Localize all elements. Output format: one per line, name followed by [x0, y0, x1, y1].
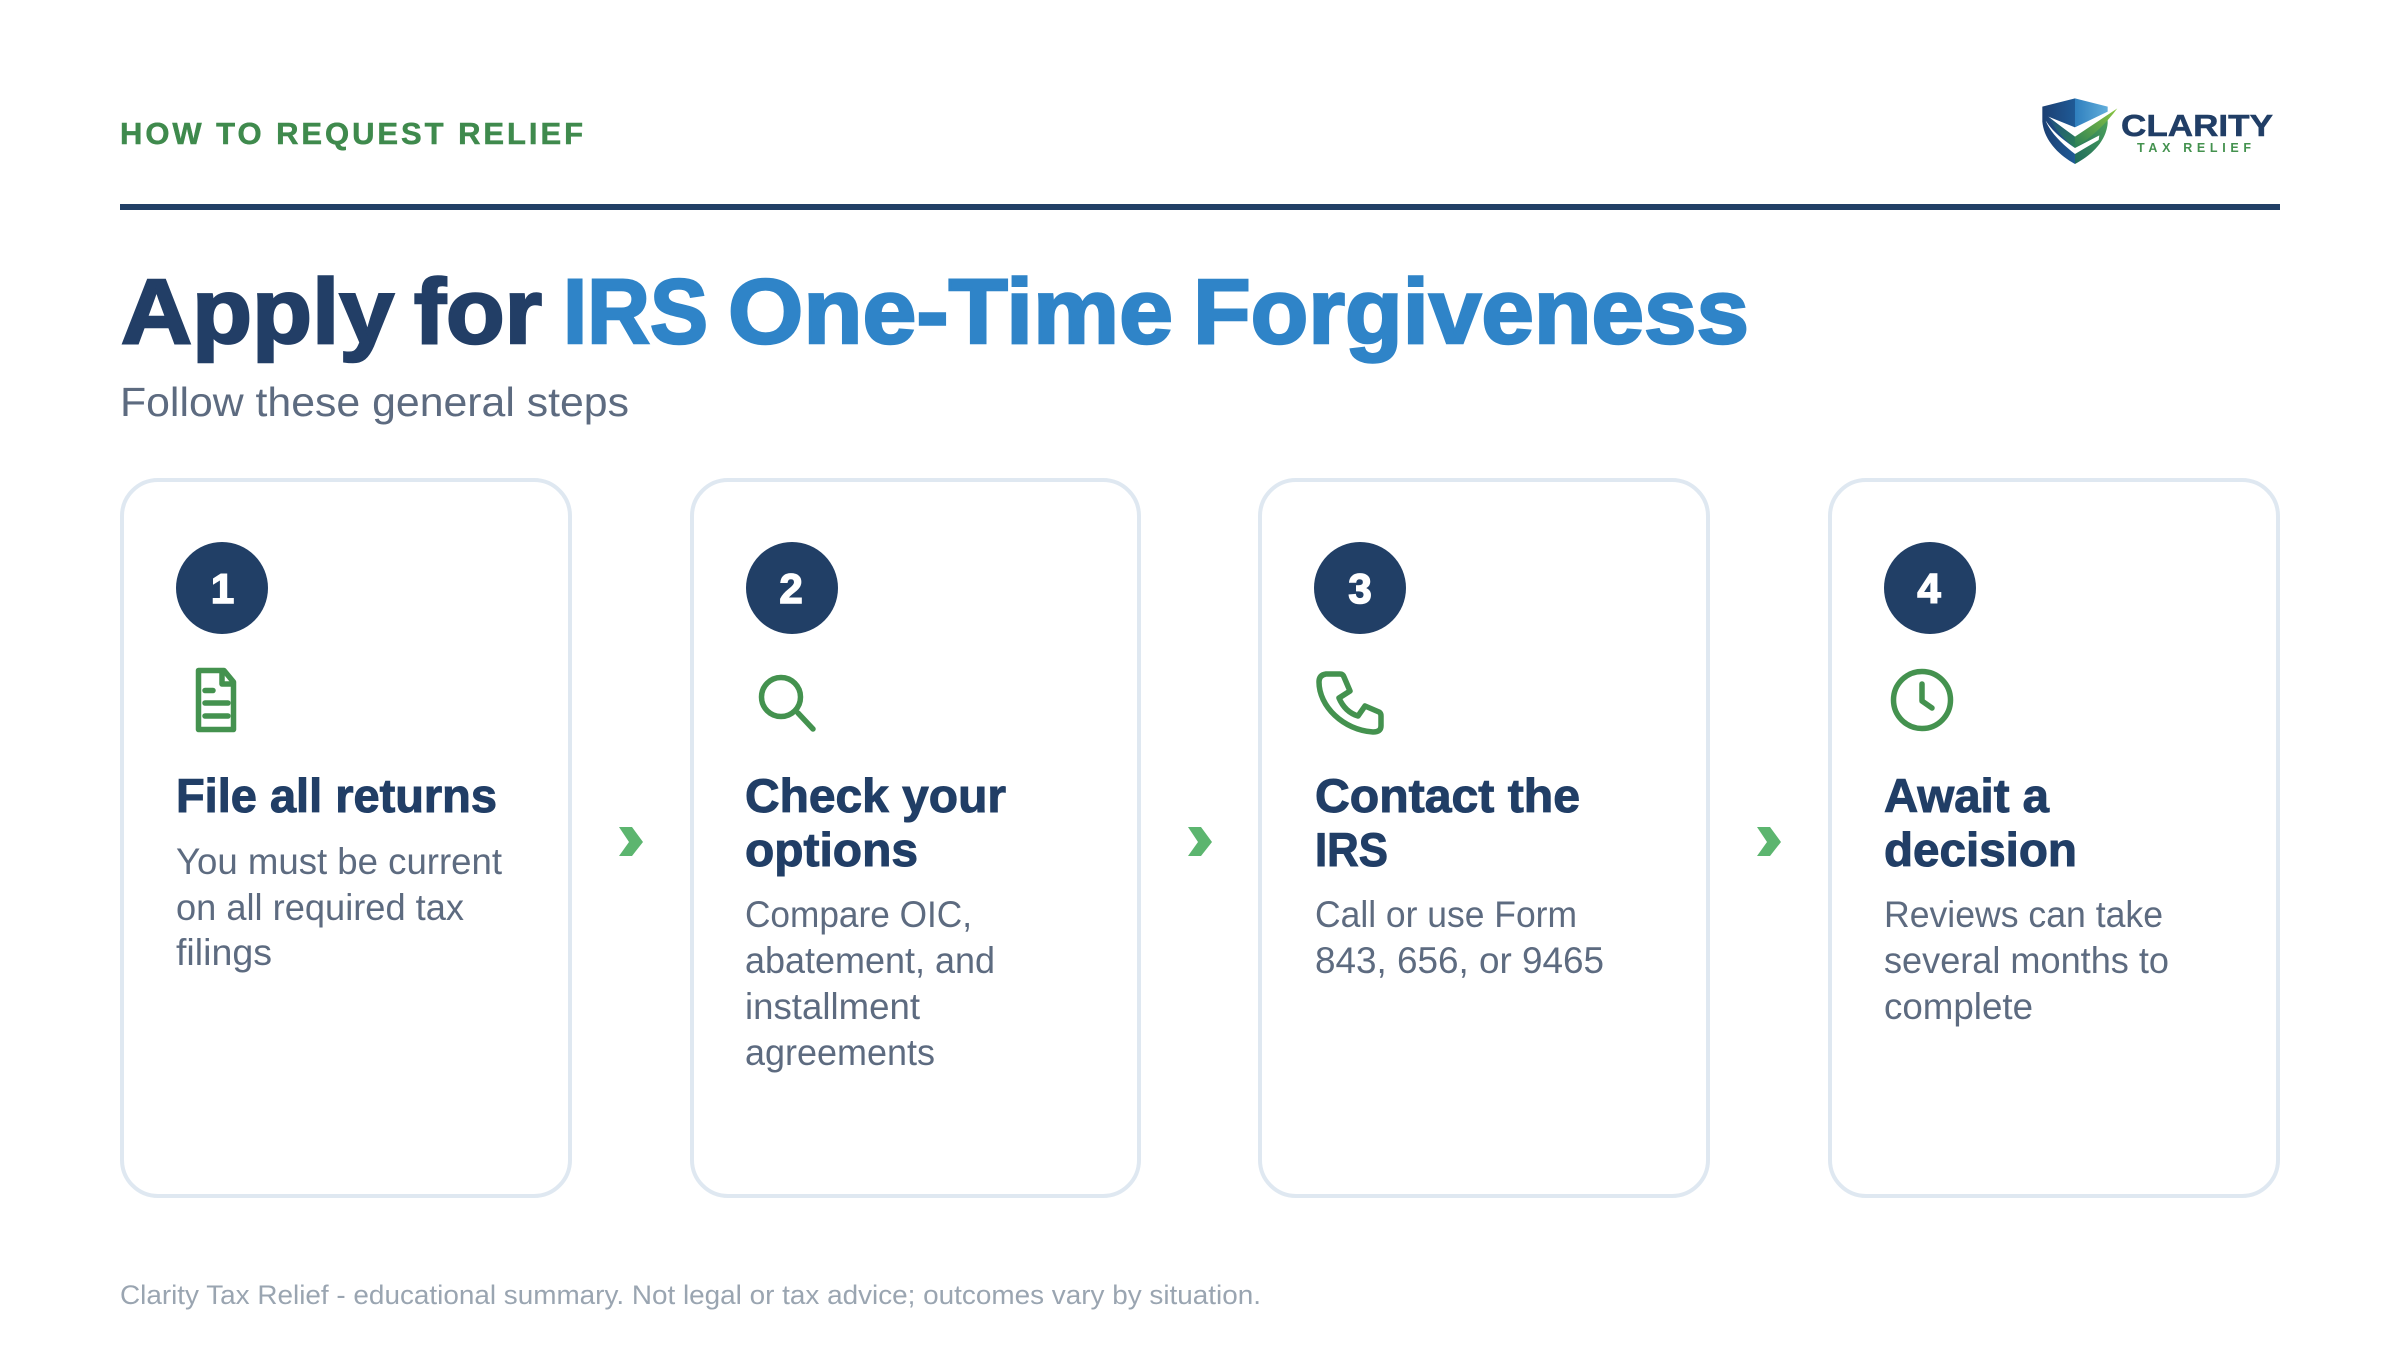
step number 1 [176, 542, 268, 634]
step heading [745, 769, 1006, 876]
step description: complete [1884, 986, 2033, 1027]
step description: You must be current [176, 841, 503, 882]
icon: clock [1894, 672, 1950, 728]
icon: shield with check [2042, 98, 2117, 164]
step heading: decision [1884, 823, 2077, 876]
step description: 843, 656, or 9465 [1315, 940, 1604, 981]
logo wordmark: CLARITY [2121, 108, 2273, 143]
step number 4 [1884, 542, 1976, 634]
step description [1884, 894, 2169, 1027]
step heading [1315, 769, 1580, 876]
arrow 1 [619, 827, 643, 856]
panel: step 2 [692, 480, 1139, 1196]
eyebrow heading: HOW TO REQUEST RELIEF [120, 116, 583, 151]
step description: installment [745, 986, 921, 1027]
title: Forgiveness [1193, 261, 1749, 363]
panel: step 4 [1830, 480, 2278, 1196]
step heading: options [745, 823, 918, 876]
title: IRS [563, 261, 708, 363]
icon: document [198, 670, 234, 730]
step number 2: 2 [779, 565, 803, 612]
step description: abatement, and [745, 940, 995, 981]
step description [176, 841, 503, 973]
step description: Compare OIC, [745, 894, 972, 935]
step number 3 [1314, 542, 1406, 634]
subtitle: Follow these general steps [120, 379, 629, 425]
panel: step 3 [1260, 480, 1708, 1196]
step number 2 [746, 542, 838, 634]
step heading: Check your [745, 769, 1006, 822]
step number 3: 3 [1348, 565, 1372, 612]
step heading: File all returns [176, 769, 497, 822]
step description: filings [176, 932, 272, 973]
step description: Reviews can take [1884, 894, 2163, 935]
step heading: Await a [1884, 769, 2050, 822]
step description [745, 894, 995, 1073]
step description: Call or use Form [1315, 894, 1577, 935]
step heading: Contact the [1315, 769, 1580, 822]
step description [1315, 894, 1604, 981]
step description: several months to [1884, 940, 2169, 981]
icon: magnifier [762, 678, 813, 729]
arrow 2 [1188, 827, 1212, 856]
step description: on all required tax [176, 887, 464, 928]
title: One-Time [728, 261, 1173, 363]
footer disclaimer: Clarity Tax Relief - educational summary. Not legal or tax advice; outcomes vary by situation. [120, 1280, 1261, 1310]
title: for [414, 261, 542, 363]
title: Apply [121, 261, 394, 363]
panel: step 1 [122, 480, 570, 1196]
icon: phone [1319, 674, 1381, 732]
step heading [1884, 769, 2077, 876]
step number 1: 1 [211, 565, 234, 612]
step heading: IRS [1315, 823, 1388, 876]
step number 4: 4 [1917, 565, 1941, 612]
arrow 3 [1757, 827, 1781, 856]
title [121, 261, 1749, 363]
logo tagline: TAX RELIEF [2137, 141, 2251, 155]
step description: agreements [745, 1032, 935, 1073]
logo: Clarity Tax Relief [2042, 98, 2273, 164]
